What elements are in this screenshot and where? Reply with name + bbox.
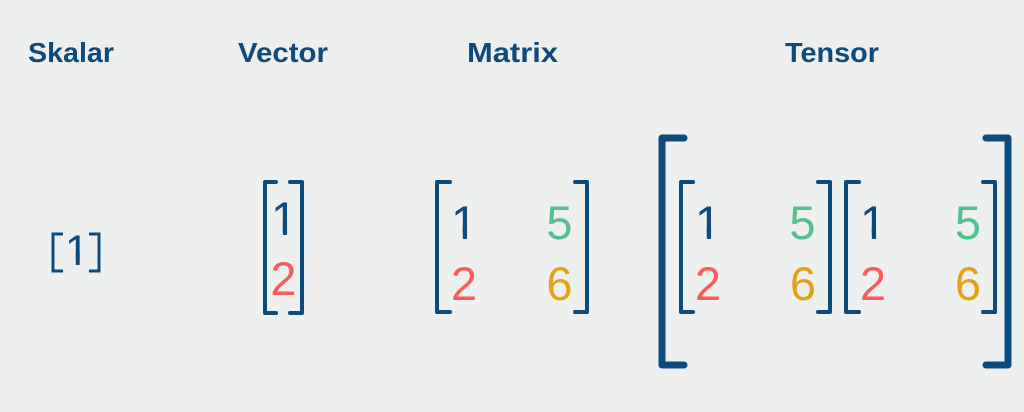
- matrix: 2: [451, 257, 477, 310]
- second matrix: [846, 182, 995, 312]
- first matrix: [681, 182, 830, 312]
- scalar value: [52, 232, 100, 272]
- matrix: 1: [451, 196, 477, 249]
- second matrix: 5: [955, 196, 981, 249]
- first matrix: 5: [789, 196, 816, 249]
- vector: [265, 182, 302, 313]
- title: Skalar: Skalar: [28, 37, 114, 68]
- second matrix: 1: [860, 196, 886, 249]
- title: Tensor: Tensor: [785, 37, 879, 68]
- matrix: 5: [546, 196, 573, 249]
- title: Matrix: Matrix: [467, 37, 558, 68]
- matrix: [437, 182, 587, 312]
- vector: 1: [271, 192, 297, 245]
- title: Vector: Vector: [238, 37, 328, 68]
- matrix: 6: [546, 257, 573, 310]
- first matrix: 1: [695, 196, 721, 249]
- vector: 2: [270, 252, 297, 305]
- tensor: [662, 138, 1008, 365]
- second matrix: 2: [860, 257, 886, 310]
- second matrix: 6: [955, 257, 981, 310]
- outer tensor brackets: [662, 138, 1008, 365]
- scalar value: 1: [65, 227, 89, 275]
- first matrix: 2: [695, 257, 721, 310]
- first matrix: 6: [790, 257, 816, 310]
